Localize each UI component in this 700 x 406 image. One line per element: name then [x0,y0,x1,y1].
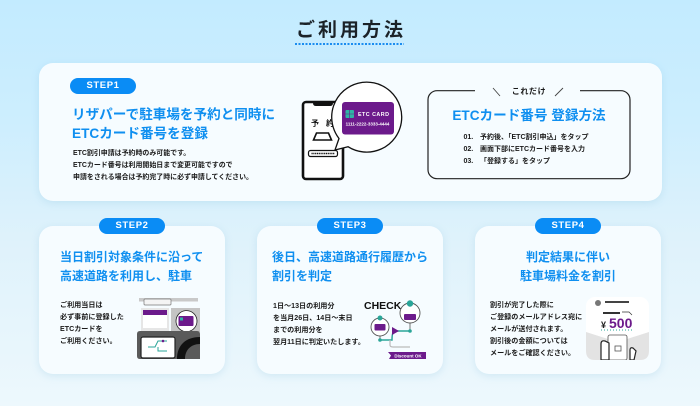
ETC card: ETC CARD [358,112,389,118]
step 1 body text: ETCカード番号は利用開始日まで変更可能ですので [73,162,233,169]
step 3 body text: までの利用分を [273,326,323,334]
step 4 heading [520,250,616,283]
step 2 body text: ご利用ください。 [60,337,117,345]
step 2 body text: ETCカードを [60,325,103,333]
ETC card [342,102,394,134]
step 1 body text [73,149,253,181]
step 4 body text: 割引後の金額については [490,337,568,345]
step 4 badge [535,218,601,234]
phone [303,101,343,179]
step 4 heading: 判定結果に伴い [526,250,610,264]
step 4 heading: 駐車場料金を割引 [520,269,616,283]
step 4 body text: メールをご確認ください。 [490,349,575,357]
step 1 badge: STEP1 [86,80,120,91]
illustration: discount mail on phone [586,297,649,360]
step 1 badge [70,78,136,94]
step 2 body text [60,300,124,345]
step 3 body text: 1日～13日の利用分 [273,302,334,310]
panel: step 1 [39,63,662,201]
step 1 body text: 申請をされる場合は予約完了時に必ず申請してください。 [73,174,253,181]
registration steps: 「登録する」をタップ [480,158,550,165]
registration steps: 02. [464,146,473,153]
phone: 予 [311,119,319,128]
illustration: check route: Discount OK [394,354,422,358]
title: ご利用方法 [296,20,406,41]
registration steps: 01. [464,134,473,141]
step 2 heading: 高速道路を利用し、駐車 [60,268,192,282]
ETC card: 1111-2222-3333-4444 [346,122,390,126]
step 1 body text: ETC割引申請は予約時のみ可能です。 [73,150,190,157]
step 2 body text: ご利用当日は [60,301,103,309]
panel: step 3 [257,226,443,374]
registration steps: 予約後、「ETC割引申込」をタップ [480,134,588,141]
step 1 heading: リザパーで駐車場を予約と同時に [72,107,275,122]
step 4 body text [490,300,582,357]
step 4 body text: 割引が完了した際に [490,301,554,309]
illustration: phone with ETC card bubble [302,82,402,180]
step 2 badge [99,218,165,234]
step 4 body text: メールが送付されます。 [490,325,567,333]
registration box tag: これだけ [512,87,546,96]
registration steps: 03. [464,158,473,165]
step 1 heading: ETCカード番号を登録 [72,126,208,141]
registration box heading: ETCカード番号 登録方法 [452,108,606,123]
registration steps [464,133,588,165]
illustration: check route: CHECK [364,300,402,312]
speech bubble [332,82,402,152]
step 3 badge: STEP3 [333,220,367,231]
step 3 heading: 後日、高速道路通行履歴から [272,250,428,264]
step 2 heading: 当日割引対象条件に沿って [60,250,203,264]
illustration: discount mail on phone: ¥ [601,320,606,330]
step 4 body text: ご登録のメールアドレス宛に [490,313,582,321]
panel: step 2 [39,226,225,374]
step 3 body text: 翌月11日に判定いたします。 [273,338,365,346]
panel: step 4 [475,226,661,374]
illustration: discount mail on phone: 500 [609,315,633,331]
illustration: car dashboard navigation [137,298,200,359]
illustration: check route [364,300,426,359]
step 3 badge [317,218,383,234]
step 2 badge: STEP2 [115,220,149,231]
step 4 badge: STEP4 [551,220,585,231]
step 3 heading: 割引を判定 [272,268,332,282]
step 3 heading [272,250,428,282]
title dotted underline [295,43,404,45]
step 3 body text [273,302,365,346]
step 1 heading [72,107,275,141]
step 2 body text: 必ず事前に登録した [60,313,124,321]
step 2 heading [60,250,203,282]
phone: 約 [326,118,334,128]
panel: ETC card registration [427,87,631,180]
registration steps: 画面下部にETCカード番号を入力 [480,146,585,153]
step 3 body text: を当月26日、14日～末日 [273,314,353,322]
registration box outline [427,88,631,180]
